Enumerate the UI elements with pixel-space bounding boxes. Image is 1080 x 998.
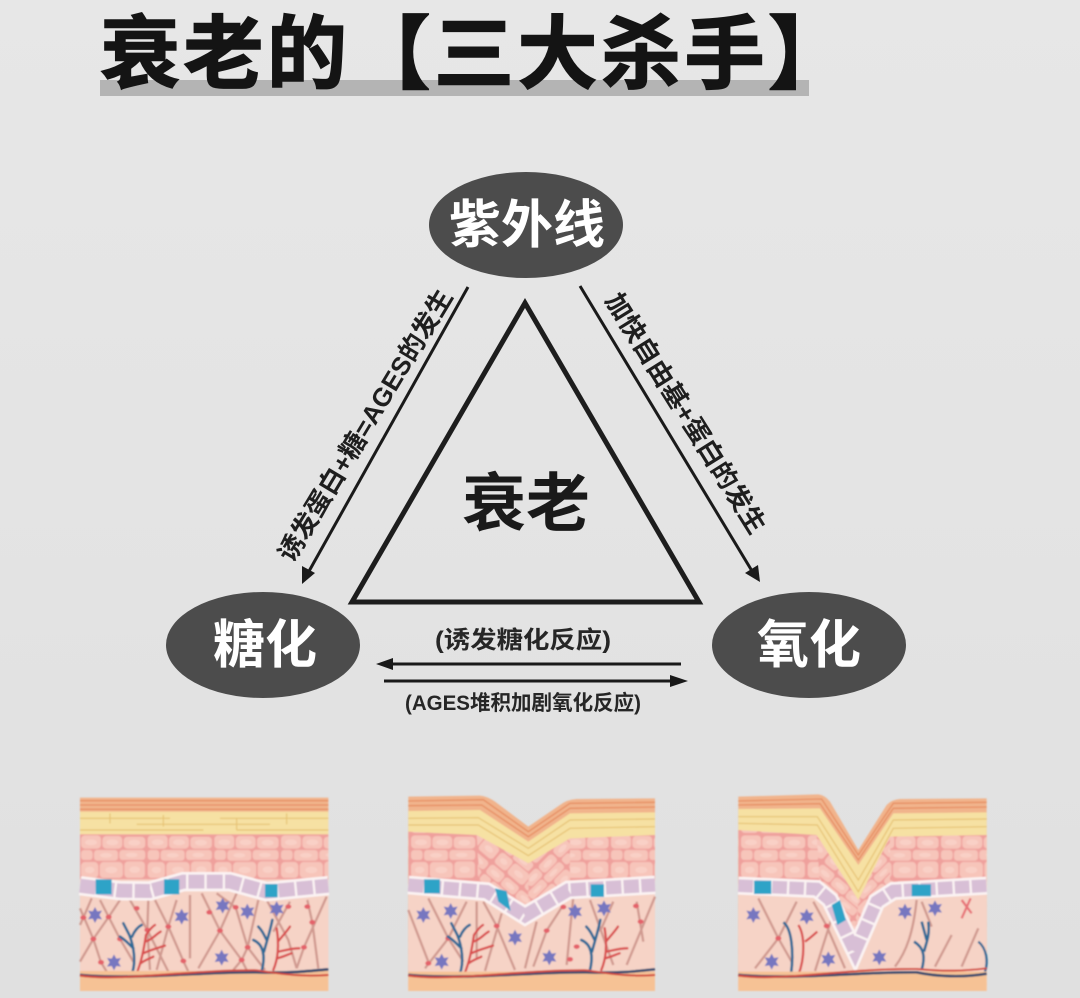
arrow: UV to glycation — [302, 287, 468, 584]
central triangle — [352, 303, 699, 602]
arrow: oxidation to glycation — [376, 658, 681, 670]
node: glycation: 糖化 — [213, 617, 317, 675]
centre label: 衰老 — [462, 468, 590, 540]
skin panel: smooth skin — [80, 798, 328, 991]
arrow label: bottom: (AGES堆积加剧氧化反应) — [405, 691, 641, 715]
title with highlight band: 衰老的【三大杀手】 — [100, 10, 852, 99]
arrow label: top: (诱发糖化反应) — [435, 627, 611, 654]
node: oxidation — [712, 592, 906, 698]
skin panel: deep wrinkle — [738, 794, 987, 991]
arrow: glycation to oxidation — [384, 675, 688, 687]
skin panel: shallow wrinkle — [408, 796, 655, 991]
node: UV — [429, 172, 623, 278]
arrow label: right: 加快自由基+蛋白的发生 — [599, 287, 772, 539]
triangle diagram — [166, 172, 906, 715]
arrow label: left: 诱发蛋白+糖=AGES的发生 — [272, 284, 458, 567]
node: UV: 紫外线 — [449, 197, 605, 255]
arrow: UV to oxidation — [580, 286, 760, 582]
node: glycation — [166, 592, 360, 698]
node: oxidation: 氧化 — [757, 617, 861, 675]
